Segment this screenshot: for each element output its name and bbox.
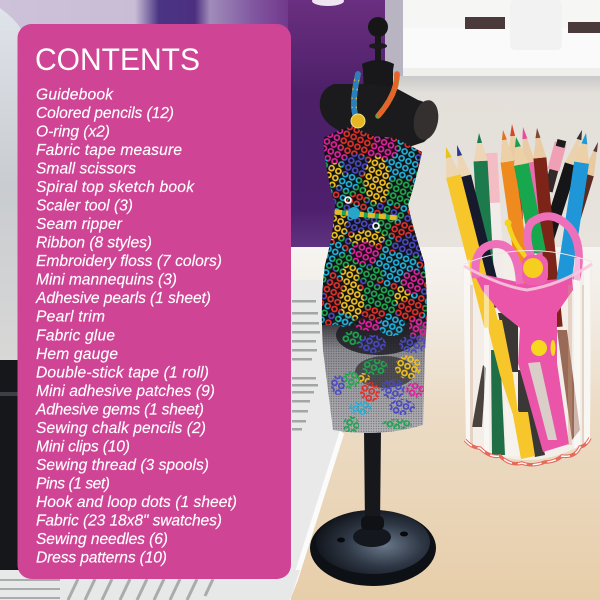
white pattern book (285, 280, 344, 600)
contents items: Scaler tool (3) (36, 198, 133, 215)
contents items: Sewing chalk pencils (2) (36, 420, 206, 437)
black pencil (538, 128, 588, 252)
contents items: Fabric glue (36, 327, 115, 344)
orange pencil (496, 129, 532, 291)
contents items: Hem gauge (36, 346, 118, 363)
contents items: Sewing thread (3 spools) (36, 457, 209, 474)
pencils seen through glass (472, 313, 580, 459)
brown pencil (565, 140, 600, 234)
contents items: Small scissors (36, 161, 136, 178)
contents items: Ribbon (8 styles) (36, 235, 152, 252)
gold brooch (351, 114, 365, 128)
blue pencil (556, 132, 593, 282)
contents items: Mini adhesive patches (9) (36, 383, 215, 400)
bright green pencil (509, 136, 546, 254)
mannequin torso and finial (320, 17, 441, 150)
braided necklace (354, 74, 397, 116)
contents items: Dress patterns (10) (36, 550, 167, 567)
contents items: Adhesive gems (1 sheet) (35, 401, 204, 418)
dark green pencil (472, 133, 494, 281)
contents items: Fabric tape measure (36, 142, 182, 159)
window and wall (385, 0, 600, 247)
yellow pencil (439, 145, 499, 328)
contents items: Embroidery floss (7 colors) (36, 253, 222, 270)
contents items: Mini clips (10) (36, 438, 130, 455)
mannequin with sequin dress (310, 17, 441, 586)
pink chalk pencil (542, 138, 567, 193)
title: CONTENTS (35, 41, 200, 77)
pink pencil (517, 126, 552, 272)
contents items: Seam ripper (36, 216, 123, 233)
contents items: Sewing needles (6) (36, 531, 168, 548)
dark red pencil (531, 127, 563, 328)
panel: contents list (18, 24, 291, 579)
wooden desk (291, 247, 600, 600)
contents items: Spiral top sketch book (36, 179, 195, 196)
mannequin stand (310, 430, 436, 586)
contents items (35, 86, 237, 567)
red tipped pencil (506, 124, 523, 220)
white table area behind mannequin (291, 278, 401, 338)
navy pencil (451, 143, 504, 309)
pencil cup with pencils and scissors (439, 124, 600, 465)
white striped mat at bottom (0, 570, 300, 600)
black box at left (0, 360, 22, 575)
contents items: Pearl trim (36, 309, 105, 326)
fluffy white fabric (0, 8, 22, 365)
contents items: Hook and loop dots (1 sheet) (36, 494, 237, 511)
contents items: Guidebook (36, 86, 114, 104)
contents items: Mini mannequins (3) (36, 272, 177, 289)
contents items: Pins (1 set) (36, 476, 110, 492)
contents items: O-ring (x2) (36, 124, 110, 140)
contents items: Adhesive pearls (1 sheet) (35, 290, 211, 307)
contents items: Fabric (23 18x8" swatches) (36, 512, 222, 530)
glass cup (464, 250, 592, 465)
sequin dress (322, 126, 427, 433)
cup interior (463, 247, 592, 460)
contents items: Double-stick tape (1 roll) (36, 364, 209, 381)
scissors (473, 216, 579, 452)
contents items: Colored pencils (12) (36, 105, 174, 122)
white pencil (483, 153, 505, 293)
